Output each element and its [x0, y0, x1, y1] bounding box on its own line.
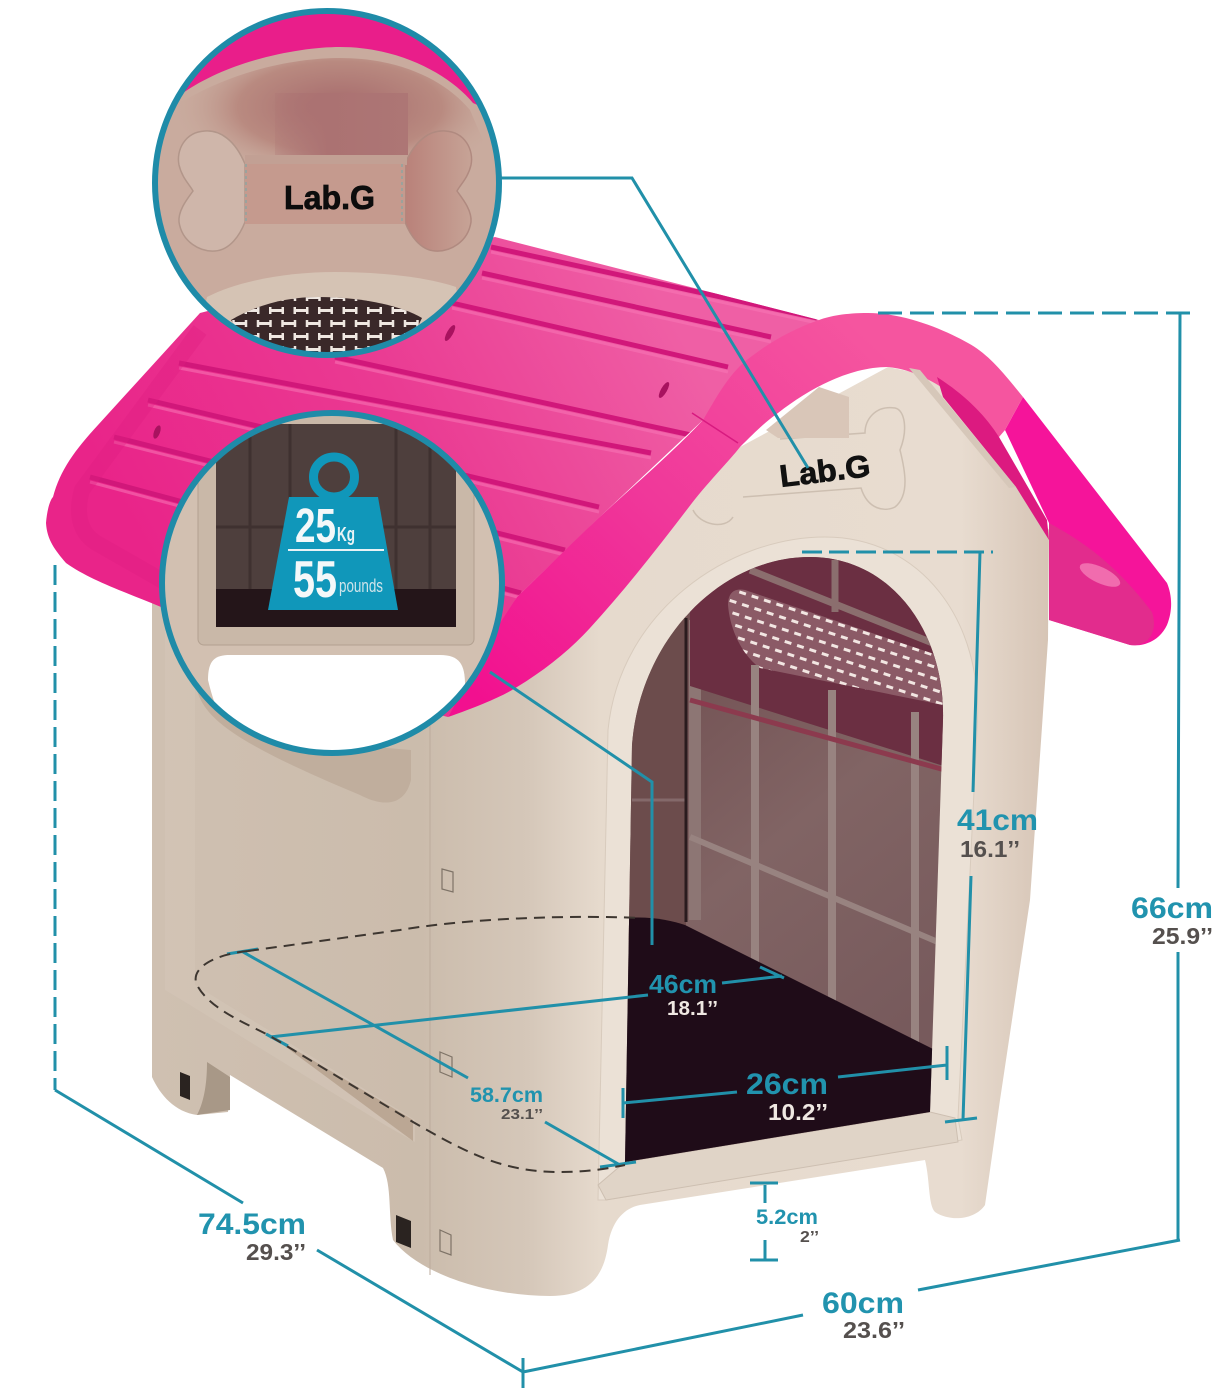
under-eave strip	[937, 377, 1049, 540]
label: interior width: 18.1’’	[667, 998, 718, 1020]
label: door height: 16.1’’	[960, 836, 1020, 862]
label: interior depth: 58.7cm	[470, 1084, 543, 1107]
front bone plaque	[693, 387, 905, 524]
floor	[620, 917, 935, 1170]
circle: weight capacity detail	[155, 405, 510, 770]
brand mark: Lab.G	[778, 448, 872, 494]
label: overall height	[1131, 892, 1213, 949]
front arch band	[448, 313, 1023, 717]
door frame	[598, 537, 978, 1200]
label: overall width	[822, 1287, 905, 1343]
sill	[598, 1112, 958, 1200]
label: door width: 10.2’’	[768, 1099, 828, 1125]
label: floor clearance: 5.2cm	[756, 1206, 818, 1229]
patch	[275, 93, 408, 155]
label: overall height: 25.9’’	[1152, 923, 1213, 949]
label: interior width	[649, 969, 718, 1020]
label: overall width: 23.6’’	[843, 1317, 905, 1343]
circle: bone emblem detail	[150, 5, 510, 370]
icon: weight: pounds	[339, 576, 383, 596]
foot holes	[180, 1072, 411, 1248]
label: overall height: 66cm	[1131, 892, 1213, 925]
icon: weight: 25	[295, 500, 336, 553]
bone emblem	[178, 131, 245, 251]
icon: weight: Kg	[337, 524, 355, 546]
label: door width	[746, 1068, 828, 1125]
brand mark: Lab.G	[284, 179, 375, 216]
label: interior depth: 23.1’’	[501, 1106, 543, 1123]
label: floor clearance	[756, 1206, 819, 1246]
floor footprint dashed outline	[196, 917, 640, 1172]
side handle recess	[197, 680, 411, 803]
label: interior width: 46cm	[649, 969, 717, 999]
label: overall depth: 74.5cm	[198, 1208, 306, 1241]
label: floor clearance: 2’’	[800, 1229, 819, 1246]
label: door height	[957, 804, 1038, 862]
clip slots	[440, 869, 453, 1255]
icon: weight	[268, 457, 398, 610]
right roof slope	[1005, 397, 1171, 645]
label: interior depth	[470, 1084, 543, 1123]
label: door width: 26cm	[746, 1068, 828, 1101]
icon: weight: 55	[293, 551, 337, 609]
handle opening	[208, 655, 465, 750]
door interior	[620, 550, 950, 1170]
roof beams	[750, 560, 945, 648]
label: door height: 41cm	[957, 804, 1038, 837]
label: overall width: 60cm	[822, 1287, 904, 1320]
roof	[46, 237, 1171, 717]
label: overall depth: 29.3’’	[246, 1239, 306, 1265]
label: overall depth	[198, 1208, 306, 1265]
house body	[152, 367, 1049, 1296]
vent	[728, 590, 943, 705]
